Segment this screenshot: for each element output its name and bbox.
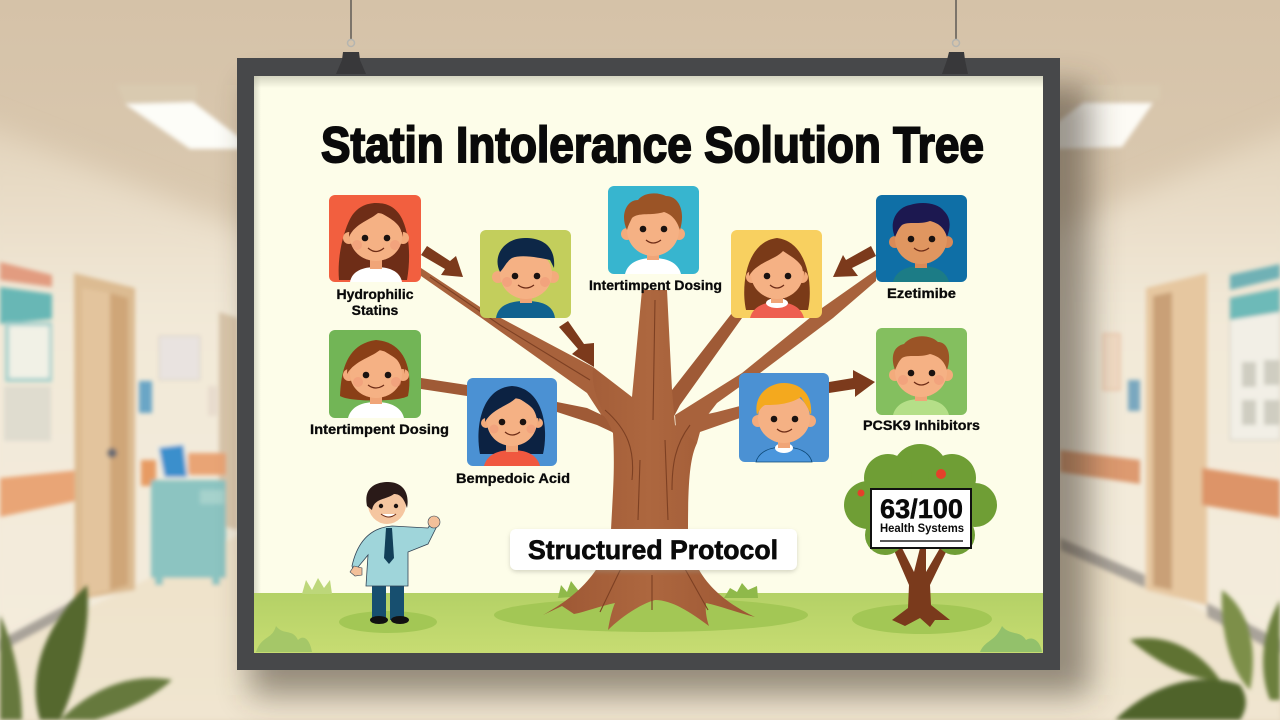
label: ezetimibe: Ezetimibe: [887, 285, 956, 301]
stat sign: 63/100: [880, 494, 963, 524]
small tree trunk: [892, 548, 950, 627]
card: blue portrait: [739, 373, 829, 462]
poster shadow: [250, 85, 1090, 695]
stat sign: Health Systems: [880, 523, 964, 535]
title: Statin Intolerance Solution Tree: [321, 117, 984, 173]
card: yellow portrait: [731, 230, 822, 318]
card: intertimpent dosing top: [608, 186, 699, 274]
branch: upper left: [421, 268, 640, 450]
arrow: hydrophilic statins to lime card: [421, 246, 463, 277]
poster panel: [254, 76, 1043, 653]
doctor figure: [350, 482, 440, 624]
plant: right foreground: [1115, 590, 1280, 720]
plant: left foreground: [0, 585, 172, 720]
grass decorations: [256, 578, 1042, 652]
branch: far right: [675, 270, 876, 430]
small tree with stat sign: [844, 444, 997, 627]
card: bempedoic acid: [467, 378, 557, 466]
branch: lower right: [672, 406, 740, 445]
label: hydrophilic statins: Statins: [352, 302, 399, 318]
hanging wires and clips: [336, 0, 968, 74]
label: bempedoic acid: Bempedoic Acid: [456, 470, 570, 486]
structured protocol label: [510, 529, 797, 572]
branch: lower left: [421, 378, 622, 440]
label: intertimpent dosing top: Intertimpent Dosing: [589, 277, 722, 293]
card: pcsk9 inhibitors: [876, 328, 967, 415]
branch: upper right: [672, 313, 742, 420]
label: hydrophilic statins: Hydrophilic: [336, 286, 414, 302]
arrow: lime card down to trunk: [559, 321, 594, 367]
card: ezetimibe: [876, 195, 967, 282]
ground: [254, 593, 1043, 653]
card: lime portrait: [480, 230, 571, 318]
label: pcsk9 inhibitors: PCSK9 Inhibitors: [863, 417, 980, 433]
small tree crown: [844, 444, 997, 555]
arrow: ezetimibe to yellow card: [833, 246, 876, 277]
trunk: [543, 290, 755, 630]
card: intertimpent dosing left: [329, 330, 421, 418]
label: intertimpent dosing left: Intertimpent Dosing: [310, 421, 449, 437]
bark lines: [430, 277, 708, 612]
poster frame: [237, 58, 1060, 670]
card: hydrophilic statins: [329, 195, 421, 282]
solution tree: [421, 268, 876, 630]
stat sign: [871, 489, 971, 548]
arrow: blue card to PCSK9 inhibitors: [829, 370, 875, 397]
structured protocol label: Structured Protocol: [528, 535, 778, 565]
